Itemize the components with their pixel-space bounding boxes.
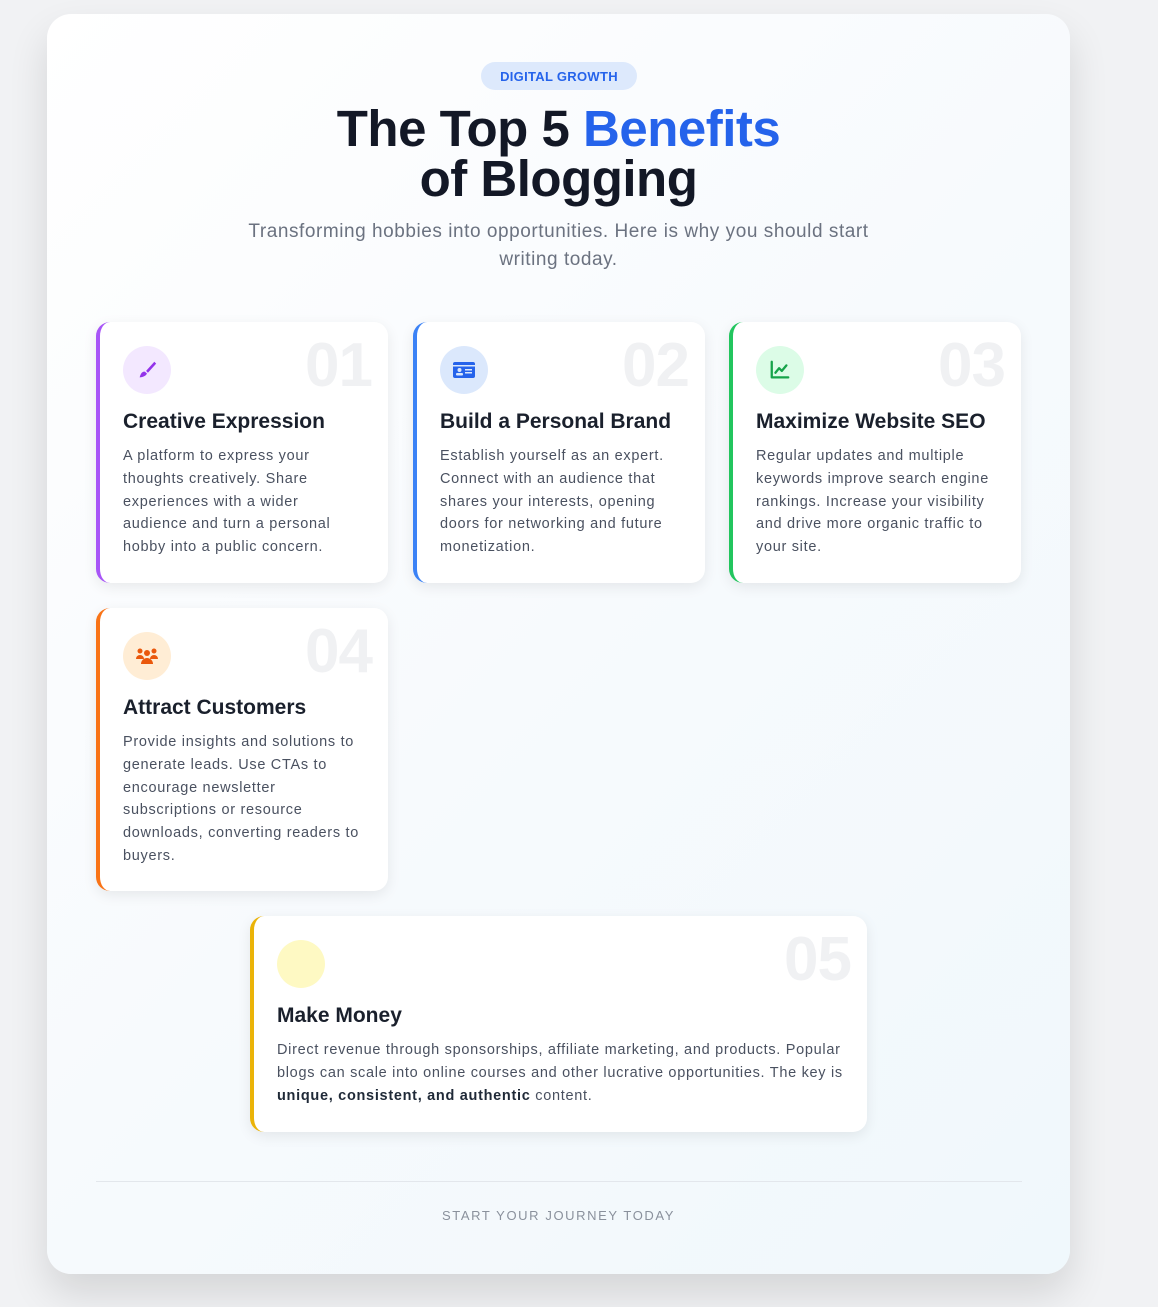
card 3: website seo: Maximize Website SEO bbox=[756, 410, 986, 433]
badge: digital growth bbox=[481, 62, 637, 90]
card 3: website seo: your site. bbox=[756, 539, 822, 555]
subtitle: Transforming hobbies into opportunities. Here is why you should start bbox=[248, 221, 869, 242]
title: The Top 5 Benefits bbox=[337, 100, 780, 157]
icon: coin bbox=[277, 940, 325, 988]
card 2: personal brand: 02 bbox=[622, 331, 689, 400]
card 5: make money: Make Money bbox=[277, 1004, 402, 1027]
card 1: creative expression: hobby into a public concern. bbox=[123, 539, 323, 555]
card 5: make money: blogs can scale into online courses and other lucrative opportunities. The key is bbox=[277, 1065, 843, 1081]
card 1: creative expression: audience and turn a personal bbox=[123, 516, 330, 532]
card 1: creative expression: 01 bbox=[305, 331, 372, 400]
subtitle: writing today. bbox=[499, 249, 618, 270]
card 3: website seo: Regular updates and multiple bbox=[756, 448, 964, 464]
card 4: attract customers: Attract Customers bbox=[123, 696, 306, 719]
card 5: make money bbox=[250, 916, 867, 1132]
card 4: attract customers: encourage newsletter bbox=[123, 780, 276, 796]
card 4: attract customers: downloads, converting readers to bbox=[123, 825, 359, 841]
card 1: creative expression: experiences with a wider bbox=[123, 494, 299, 510]
card 3: website seo: and drive more organic traffic to bbox=[756, 516, 983, 532]
subtitle bbox=[248, 221, 869, 270]
icon: paintbrush bbox=[123, 346, 171, 394]
card 2: personal brand bbox=[413, 322, 705, 583]
card 3: website seo: keywords improve search engine bbox=[756, 471, 989, 487]
card 2: personal brand: doors for networking and future bbox=[440, 516, 662, 532]
card 1: creative expression: A platform to express your bbox=[123, 448, 310, 464]
card 3: website seo: rankings. Increase your visibility bbox=[756, 494, 984, 510]
card 4: attract customers: buyers. bbox=[123, 848, 175, 864]
icon: users bbox=[123, 632, 171, 680]
title: of Blogging bbox=[420, 150, 697, 207]
badge: digital growth: DIGITAL GROWTH bbox=[500, 68, 618, 84]
card 4: attract customers: 04 bbox=[305, 617, 372, 686]
card 4: attract customers: Provide insights and solutions to bbox=[123, 734, 354, 750]
card 4: attract customers: generate leads. Use CTAs to bbox=[123, 757, 327, 773]
card 3: website seo: 03 bbox=[938, 331, 1005, 400]
card 2: personal brand: Connect with an audience that bbox=[440, 471, 655, 487]
card 2: personal brand: shares your interests, opening bbox=[440, 494, 655, 510]
card 5: make money: Direct revenue through sponsorships, affiliate marketing, and products. Popular bbox=[277, 1042, 841, 1058]
card 5: make money: unique, consistent, and authentic content. bbox=[277, 1088, 592, 1104]
footer text: START YOUR JOURNEY TODAY bbox=[442, 1208, 675, 1223]
card 4: attract customers: subscriptions or resource bbox=[123, 802, 302, 818]
card 2: personal brand: monetization. bbox=[440, 539, 535, 555]
icon: chart bbox=[756, 346, 804, 394]
card 3: website seo bbox=[729, 322, 1021, 583]
icon: id card bbox=[440, 346, 488, 394]
card 1: creative expression: thoughts creatively. Share bbox=[123, 471, 308, 487]
card 1: creative expression: Creative Expression bbox=[123, 410, 325, 433]
card 2: personal brand: Build a Personal Brand bbox=[440, 410, 671, 433]
title bbox=[337, 100, 780, 207]
card 1: creative expression bbox=[96, 322, 388, 583]
card 2: personal brand: Establish yourself as an expert. bbox=[440, 448, 664, 464]
card 5: make money: 05 bbox=[784, 925, 851, 994]
card 4: attract customers bbox=[96, 608, 388, 891]
